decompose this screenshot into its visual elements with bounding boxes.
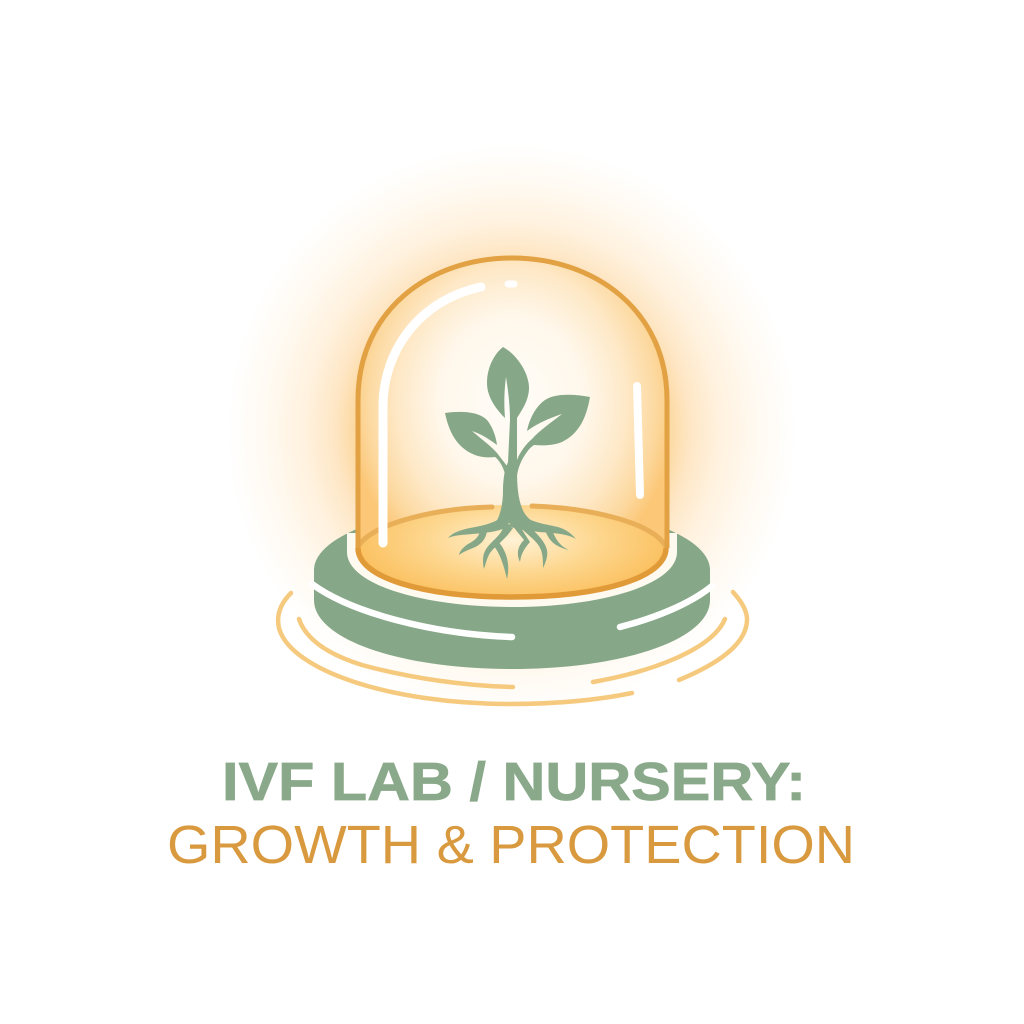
glass highlight long [383,287,481,543]
glass dome [358,258,667,597]
outer ring left [278,593,632,704]
left leaf [445,412,507,474]
root left branch [459,531,487,555]
platform highlight right [620,586,712,627]
outer ring right [679,592,747,680]
platform highlight left [312,584,512,637]
title [167,752,855,875]
dome floor back rim right [532,506,665,545]
top leaf, stem and trunk [487,347,533,524]
title line 1: IVF LAB / NURSERY: [222,752,806,812]
platform side wall [314,568,710,669]
dome glass body [358,258,667,552]
platform top surface [314,504,710,636]
root right inner [517,522,547,568]
seedling [445,347,590,579]
background glow [220,140,804,720]
right leaf [517,395,590,476]
roots [448,512,576,579]
dome floor back rim left [359,507,492,545]
root right long [508,512,576,539]
dome halo [347,533,677,607]
platform base [312,504,712,669]
dome outline [358,258,667,548]
dome floor [358,505,666,597]
root centre right [513,524,530,562]
inner ring right [593,619,725,682]
glass highlight dash [508,280,514,288]
root right branch [545,530,569,550]
root centre left [483,524,513,569]
glass highlight right [637,386,640,495]
motion rings [278,592,747,704]
inner ring left [299,619,513,687]
root left long [448,516,510,538]
title line 2: GROWTH & PROTECTION [167,815,855,875]
root centre tip [493,540,508,579]
dome floor front rim [358,548,666,597]
